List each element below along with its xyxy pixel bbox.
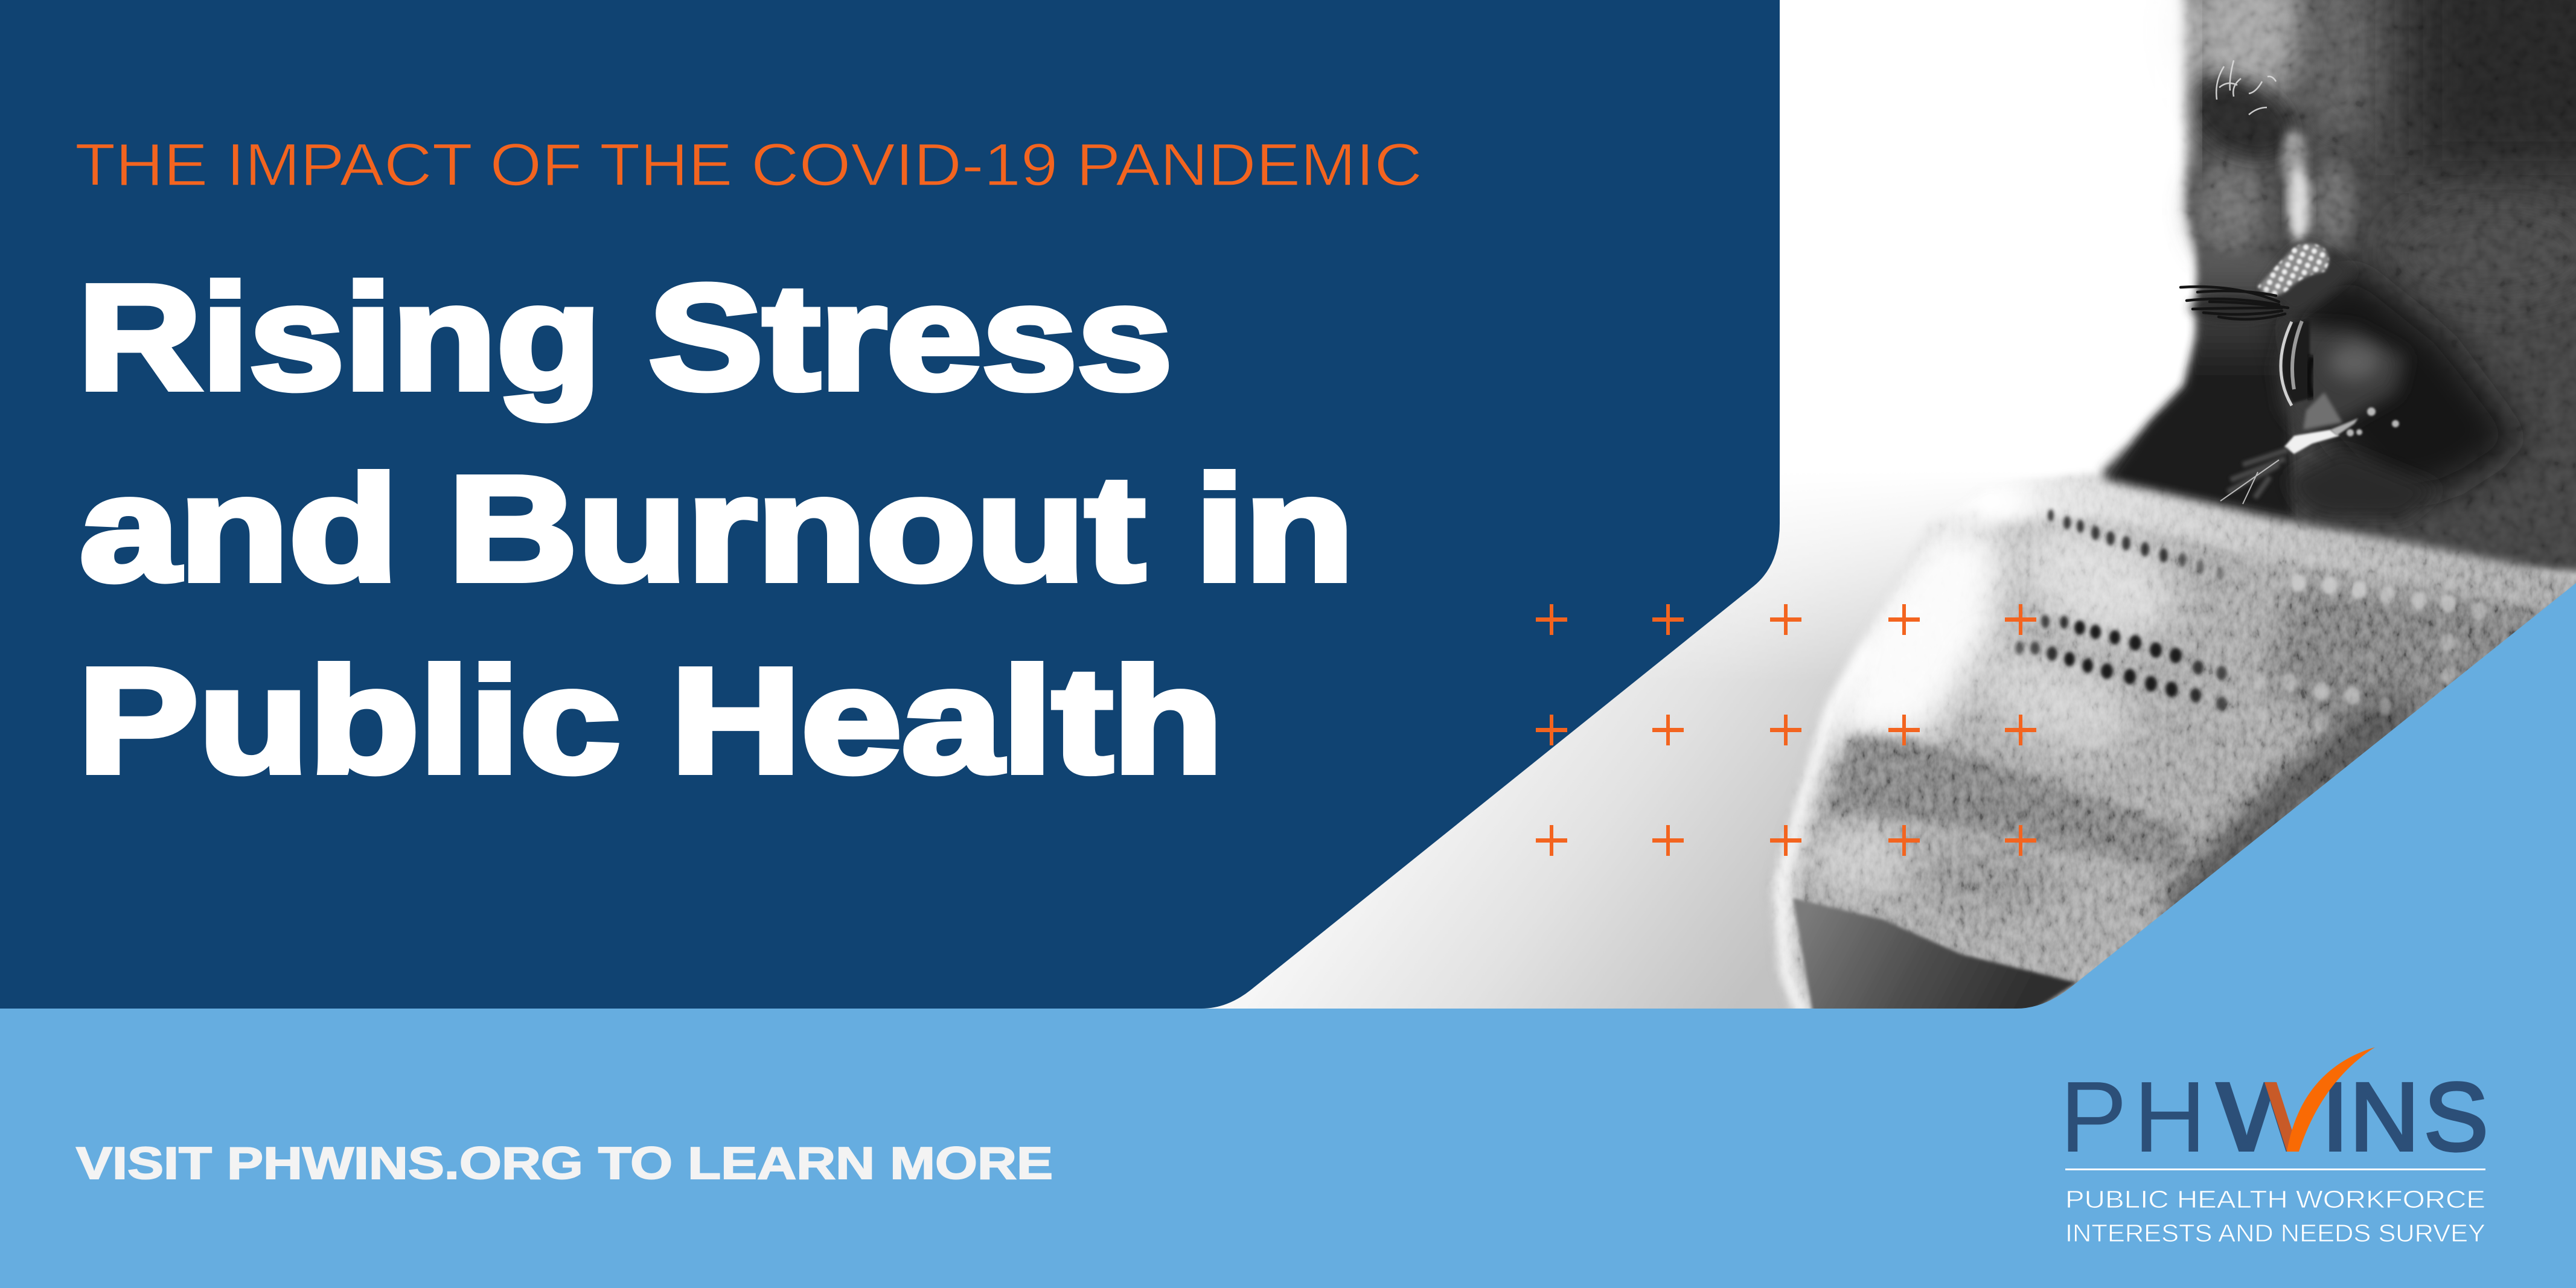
PHWINS logo: S (2424, 1062, 2488, 1171)
lower lashes (2220, 450, 2288, 504)
PHWINS logo (2060, 1047, 2488, 1247)
call to action: VISIT PHWINS.ORG TO LEARN MORE (76, 1138, 1053, 1188)
eye socket shadow (2282, 266, 2523, 501)
PHWINS logo: PUBLIC HEALTH WORKFORCE (2065, 1185, 2485, 1213)
title: Rising Stress (78, 254, 1172, 421)
upper eyelid (2258, 242, 2354, 317)
PHWINS logo: I (2322, 1062, 2348, 1171)
left void beside eye (2107, 253, 2294, 519)
PHWINS logo: H (2133, 1061, 2207, 1173)
photo: masked face (1147, 0, 2576, 1026)
surgical mask (1770, 471, 2576, 1009)
eye (2277, 320, 2406, 430)
mask stitching dots (2015, 509, 2487, 733)
title (78, 254, 1354, 804)
bottom band and blue corner (0, 583, 2576, 1288)
decorative plus marks (1536, 604, 2036, 856)
navy panel (0, 0, 1780, 1009)
logo check mark (2264, 1047, 2375, 1152)
subtitle: THE IMPACT OF THE COVID-19 PANDEMIC (75, 131, 1422, 198)
PHWINS logo: W (2217, 1062, 2323, 1171)
PHWINS logo: N (2350, 1062, 2420, 1171)
PHWINS logo: P (2060, 1061, 2127, 1173)
PHWINS logo: INTERESTS AND NEEDS SURVEY (2065, 1219, 2485, 1247)
title: Public Health (78, 637, 1223, 804)
eyebrow hairs (2216, 60, 2276, 115)
lower eyelid (2284, 407, 2439, 519)
upper lashes (2181, 287, 2288, 321)
title: and Burnout in (80, 445, 1354, 612)
face skin (2101, 0, 2576, 573)
